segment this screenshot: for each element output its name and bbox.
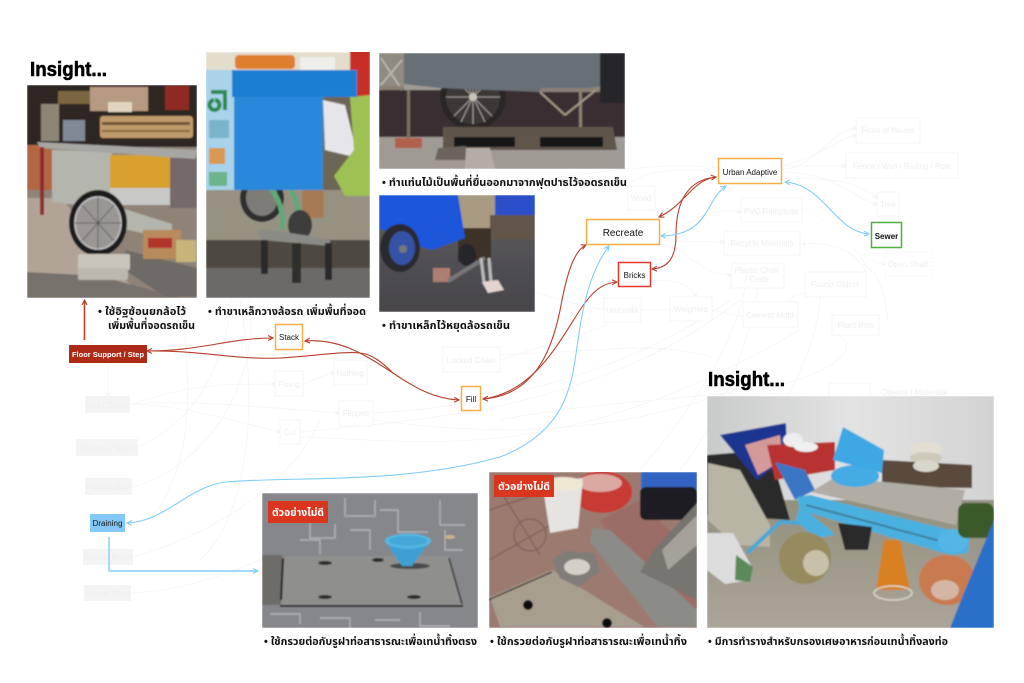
faded diagram nodes: Recycle Materials [730, 239, 794, 248]
faded diagram nodes: Animal Feed [85, 589, 129, 598]
badge: bad example 1: ตัวอย่างไม่ดี [272, 506, 324, 519]
faded diagram nodes: Tree [880, 200, 897, 209]
faded diagram nodes: Flipped [343, 409, 369, 418]
faded diagram nodes: Locked Chain [447, 356, 495, 365]
faded diagram nodes: Found Object [811, 280, 860, 289]
node: Recreate: Recreate [603, 228, 644, 239]
node: Draining [90, 514, 125, 532]
faded diagram nodes: Plastic Chair [735, 266, 780, 275]
node: Draining: Draining [93, 519, 122, 528]
photo: cart on stacked blocks [27, 85, 197, 298]
faded diagram nodes: Storage / Rack [81, 444, 134, 453]
node: Sewer [872, 222, 902, 248]
faded diagram nodes: PVC Rainpipes [744, 207, 798, 216]
badge: bad example 2 [494, 475, 554, 497]
faded diagram nodes: Cut [284, 428, 297, 437]
node: Fill [462, 386, 480, 410]
photo: filter trough above drain [707, 396, 994, 628]
faded diagram nodes: Plant Pots [838, 321, 874, 330]
node: Fill: Fill [466, 395, 476, 404]
faded diagram nodes: Objects / Materials [881, 388, 947, 397]
caption: metal stand: • ทำขาเหล็กวางล้อรถ เพิ่มพื้นที่จอด [208, 303, 366, 318]
faded diagram nodes: Umbrella [606, 306, 639, 315]
arrows: blue connections [109, 182, 869, 571]
node: Floor Support / Step [69, 345, 147, 363]
badge: bad example 1 [268, 501, 328, 523]
node: Floor Support / Step: Floor Support / Step [72, 350, 144, 359]
faded diagram nodes: Fixing [278, 380, 300, 389]
faded diagram nodes [76, 118, 958, 601]
background diagram: faded connection curves [108, 128, 888, 593]
faded diagram nodes: Front of House [862, 126, 915, 135]
faded diagram nodes: Weighted [674, 305, 708, 314]
heading: Insight left: Insight... [30, 59, 107, 81]
faded diagram nodes: / Crate [745, 275, 770, 284]
heading: Insight right: Insight... [708, 369, 785, 391]
node: Bricks: Bricks [624, 271, 645, 280]
node: Bricks [618, 262, 650, 286]
faded diagram nodes: Open Shaft [888, 260, 929, 269]
node: Stack: Stack [279, 333, 300, 342]
caption: wooden platform: • ทำแท่นไม้เป็นพื้นที่ยื่นออกมาจากฟุตปาธไว้จอดรถเข็น [382, 174, 627, 189]
faded diagram nodes: Fence / Wall / Railing / Pole [853, 162, 952, 171]
faded diagram nodes: Bed / Cabin [86, 401, 128, 410]
caption: stacked bricks: เพิ่มพื้นที่จอดรถเข็น [108, 317, 195, 332]
caption: stacked bricks [98, 305, 195, 332]
photo: cart wheel on metal stand [206, 50, 370, 298]
faded diagram nodes: Wood [631, 194, 651, 203]
faded diagram nodes: Nothing [336, 369, 364, 378]
faded diagram nodes: Cement Mold [746, 311, 794, 320]
photo: metal wheel stopper [379, 195, 535, 312]
badge: bad example 2: ตัวอย่างไม่ดี [498, 480, 550, 493]
node: Sewer: Sewer [875, 232, 898, 241]
photo: bowl and buckets by curb [488, 471, 697, 628]
faded diagram nodes: Parking Bay [86, 483, 130, 492]
caption: stacked bricks: • ใช้อิฐซ้อนยกล้อไว้ [98, 305, 186, 318]
faded diagram nodes: Animal Block [85, 553, 132, 562]
photo: wooden platform under cart [379, 53, 625, 169]
caption: wheel stopper: • ทำขาเหล็กไว้หยุดล้อรถเข็น [382, 319, 510, 332]
caption: filter trough: • มีการทำรางสำหรับกรองเศษอาหารก่อนเทน้ำทิ้งลงท่อ [708, 633, 948, 648]
caption: bowl by curb: • ใช้กรวยต่อกับรูฝาท่อสาธารณะเพื่อเทน้ำทิ้ง [490, 633, 687, 648]
node: Urban Adaptive [718, 158, 782, 184]
node: Stack [276, 324, 302, 350]
node: Recreate [586, 220, 660, 244]
node: Urban Adaptive: Urban Adaptive [723, 168, 778, 177]
photo: bowl on sewer cover [262, 493, 478, 628]
caption: bowl on cover: • ใช้กรวยต่อกับรูฝาท่อสาธารณะเพื่อเทน้ำทิ้งตรง [264, 633, 477, 648]
arrows: red connections [84, 177, 716, 400]
